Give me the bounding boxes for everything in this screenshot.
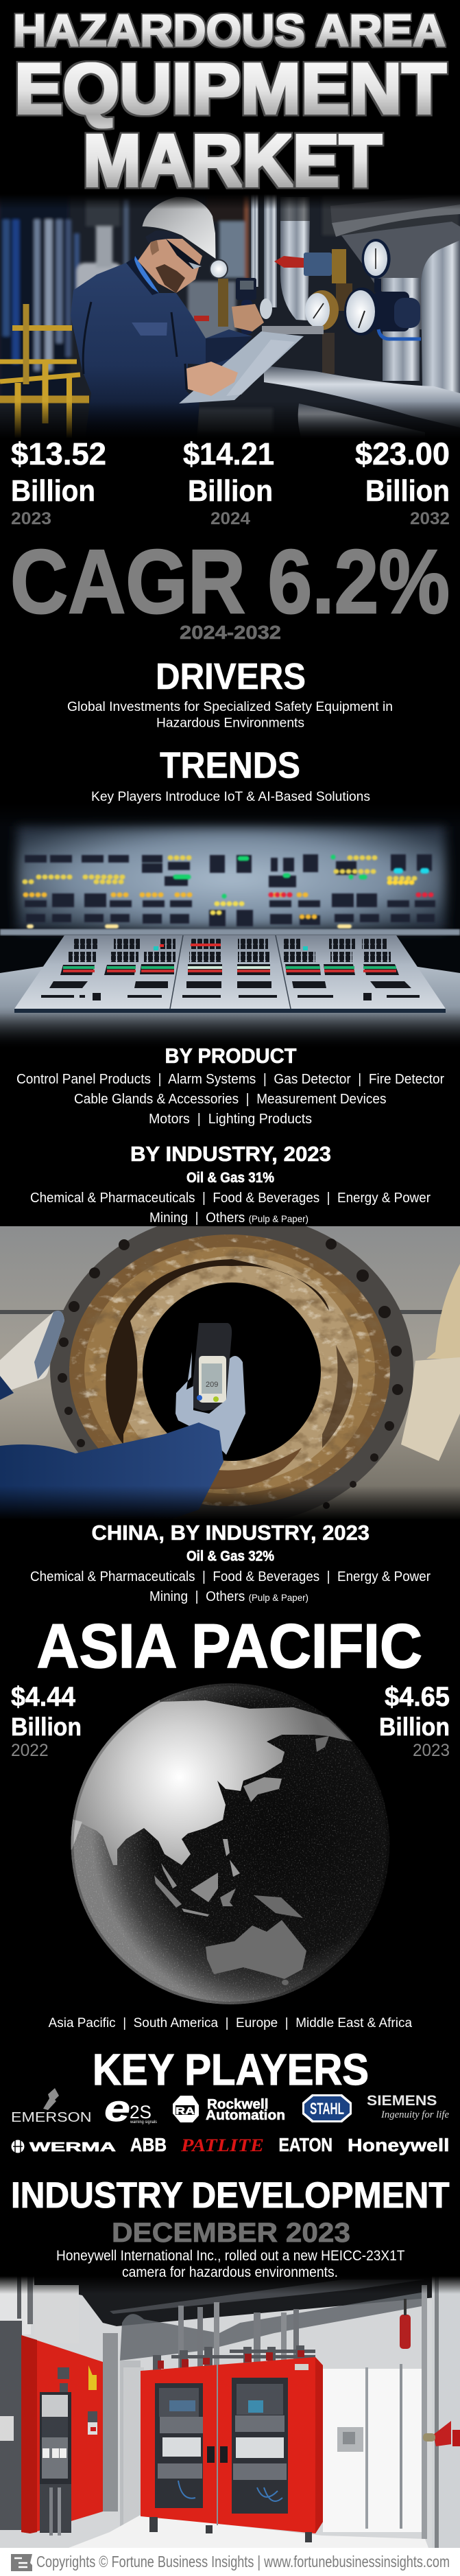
- ceiling and ducts: [34, 2276, 460, 2326]
- operator console: [14, 935, 446, 1013]
- logo: e2S: 2S: [130, 2102, 152, 2122]
- by industry 2023: Oil & Gas 31%: [186, 1170, 274, 1186]
- indicator lights: [25, 857, 433, 926]
- drivers: Global Investments for Specialized Safety Equipment in: [67, 700, 393, 714]
- logo: Emerson: [11, 2088, 92, 2125]
- gauges and valves: [194, 239, 421, 374]
- gas detector: [191, 1323, 232, 1411]
- logo: Siemens: SIEMENS: [367, 2093, 437, 2109]
- CAGR: 2024-2032: [180, 622, 281, 643]
- footer: [0, 2548, 460, 2576]
- flange inspection image: 209: [206, 1381, 218, 1389]
- APAC 2023 value: Billion: [379, 1713, 450, 1741]
- by industry 2023: [30, 1142, 431, 1226]
- industry development: DECEMBER 2023: [112, 2218, 350, 2248]
- fire cabinet image: [0, 2276, 460, 2566]
- by product: BY PRODUCT: [165, 1044, 297, 1068]
- logo: Honeywell: Honeywell: [348, 2135, 450, 2155]
- industry development: [11, 2175, 450, 2280]
- red wall box: [433, 2421, 451, 2446]
- logo: Siemens: Ingenuity for life: [380, 2109, 449, 2120]
- market size 2032: $23.00: [355, 436, 450, 471]
- market size 2024: $14.21: [183, 436, 274, 471]
- trends: TRENDS: [160, 745, 300, 786]
- logo: Rockwell Automation: [173, 2096, 285, 2123]
- extinguisher: [400, 2315, 411, 2349]
- APAC 2022 value: $4.44: [11, 1682, 76, 1712]
- by industry 2023: Chemical & Pharmaceuticals | Food & Beverages | Energy & Power: [30, 1191, 431, 1206]
- logo: Emerson: EMERSON: [11, 2110, 92, 2125]
- logo: Eaton: EATON: [278, 2134, 332, 2155]
- logo: Patlite: PATLITE: [180, 2135, 264, 2155]
- blue sleeve: [0, 1422, 223, 1519]
- logo: Stahl: [302, 2094, 352, 2122]
- market size 2023: $13.52: [11, 436, 106, 471]
- logo: Rockwell Automation: Rockwell: [207, 2097, 269, 2112]
- market size 2024: Billion: [188, 474, 273, 508]
- industry development: camera for hazardous environments.: [122, 2264, 338, 2280]
- APAC 2023 value: 2023: [413, 1741, 450, 1760]
- Asia Pacific heading: ASIA PACIFIC: [37, 1612, 422, 1681]
- globe: [65, 1683, 390, 2004]
- title: HAZARDOUS AREA: [13, 5, 446, 56]
- market size 2024: 2024: [210, 509, 250, 528]
- industry development: Honeywell International Inc., rolled out a new HEICC-23X1T: [56, 2248, 405, 2264]
- logo: e2S: [104, 2088, 157, 2129]
- market size 2024: [183, 436, 274, 528]
- title: EQUIPMENT: [14, 49, 446, 129]
- white door panels: [323, 2369, 422, 2532]
- market size 2032: 2032: [410, 509, 450, 528]
- market size 2023: [11, 436, 106, 528]
- logo: e2S: warning signals: [130, 2120, 157, 2124]
- by product: Motors | Lighting Products: [149, 1112, 312, 1127]
- key players heading: KEY PLAYERS: [93, 2045, 369, 2094]
- APAC 2022 value: 2022: [11, 1741, 49, 1760]
- wall and pipes: [120, 2361, 141, 2527]
- China by industry: CHINA, BY INDUSTRY, 2023: [92, 1521, 370, 1545]
- by product: [16, 1044, 444, 1127]
- APAC 2023 value: [379, 1682, 450, 1760]
- back wall instrument panels: [25, 854, 435, 926]
- by product: Control Panel Products | Alarm Systems | Gas Detector | Fire Detector: [16, 1072, 444, 1087]
- APAC 2023 value: $4.65: [385, 1682, 450, 1712]
- title: MARKET: [83, 119, 382, 202]
- trends: [91, 745, 370, 804]
- central red cabinet: [141, 2357, 323, 2533]
- pressure tank: [341, 222, 460, 329]
- title: [13, 5, 446, 202]
- floor: [69, 2515, 428, 2548]
- logo: Werma: [11, 2140, 116, 2154]
- desk surface: [0, 929, 460, 935]
- flange: [50, 1213, 413, 1525]
- market size 2023: 2023: [11, 509, 51, 528]
- China by industry: Oil & Gas 32%: [186, 1548, 274, 1565]
- drivers: DRIVERS: [156, 656, 306, 697]
- by industry 2023: Mining | Others (Pulp & Paper): [149, 1210, 308, 1226]
- regions list: Asia Pacific | South America | Europe | Middle East & Africa: [49, 2016, 412, 2030]
- logo: e2S: e: [104, 2088, 130, 2129]
- big silver pipes: [421, 240, 460, 408]
- logo: ABB: ABB: [130, 2134, 167, 2155]
- central pipes: [251, 194, 258, 287]
- drivers: Hazardous Environments: [156, 716, 304, 730]
- logo: Siemens: [367, 2093, 449, 2120]
- hero image: engineer inspecting gauges: [0, 194, 460, 439]
- China by industry: Mining | Others (Pulp & Paper): [149, 1589, 308, 1604]
- left glove: [0, 1311, 64, 1390]
- trends: Key Players Introduce IoT & AI-Based Solutions: [91, 790, 370, 804]
- market size 2032: Billion: [365, 474, 450, 508]
- pipework above cabinet: [153, 2345, 315, 2373]
- flange inspection image: [0, 1213, 460, 1525]
- China by industry: [30, 1521, 431, 1604]
- market size 2023: Billion: [11, 474, 95, 508]
- logo: Rockwell Automation: Automation: [206, 2108, 285, 2123]
- APAC 2022 value: [11, 1682, 82, 1760]
- yellow safety railings: [0, 304, 89, 436]
- logo: Werma: WERMA: [29, 2140, 116, 2154]
- by product: Cable Glands & Accessories | Measurement Devices: [74, 1092, 387, 1107]
- worker: [71, 197, 304, 439]
- logo: Stahl: STAHL: [310, 2100, 344, 2118]
- control room image: [0, 804, 460, 1049]
- by industry 2023: BY INDUSTRY, 2023: [130, 1142, 331, 1166]
- China by industry: Chemical & Pharmaceuticals | Food & Beverages | Energy & Power: [30, 1569, 431, 1584]
- drivers: [67, 656, 393, 730]
- left red cabinet: [0, 2321, 103, 2536]
- cream pipe and duct: [426, 1264, 460, 1359]
- bolt holes: [58, 1239, 403, 1509]
- market size 2032: [355, 436, 450, 528]
- logo: Rockwell Automation: RA: [175, 2105, 195, 2117]
- footer logo: [11, 2554, 32, 2571]
- right glove: [175, 1352, 245, 1455]
- APAC 2022 value: Billion: [11, 1713, 82, 1741]
